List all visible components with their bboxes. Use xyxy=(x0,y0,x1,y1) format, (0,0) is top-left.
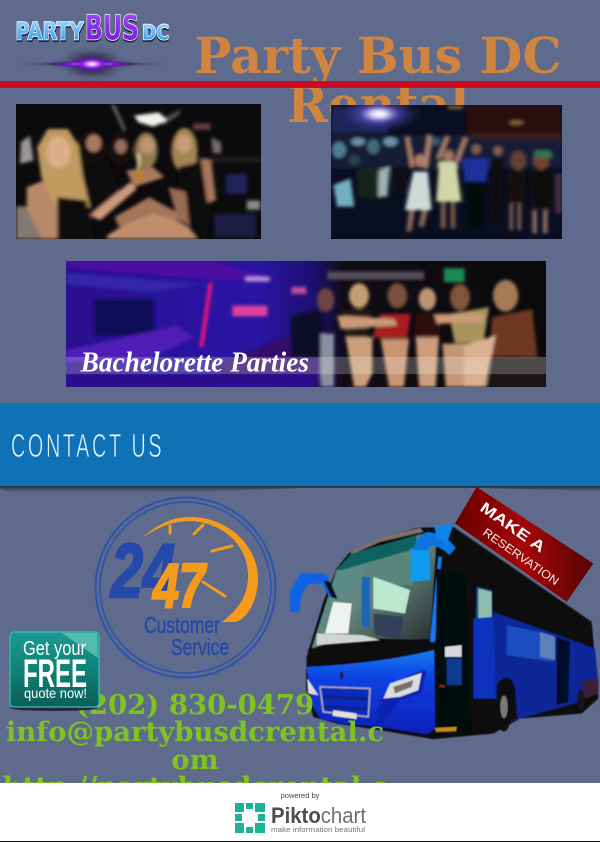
mirrors xyxy=(290,524,456,612)
ribbon: make a reservation xyxy=(455,487,593,602)
contact details: info@partybusdcrental.com xyxy=(6,716,384,776)
piktochart logo: Piktochart xyxy=(271,803,366,828)
lower black band xyxy=(308,638,433,665)
blond woman back xyxy=(135,132,158,169)
logo: Party Bus DC: PARTY xyxy=(16,19,84,47)
logo: Party Bus DC: DC xyxy=(142,20,169,44)
piktochart logo: powered by xyxy=(281,791,320,800)
windshield xyxy=(312,534,437,648)
badge: 24/7 customer service xyxy=(94,496,276,678)
gauge arc xyxy=(142,517,258,622)
button: get your free quote now: Get your xyxy=(23,638,86,660)
ribbon: make a reservation: MAKE A xyxy=(477,499,548,556)
contact details xyxy=(2,692,388,783)
sign xyxy=(327,272,424,280)
photo: dancing crowd xyxy=(331,105,562,239)
logo: Party Bus DC: DC xyxy=(142,22,169,46)
badge: 24/7 customer service: 24 xyxy=(109,529,175,614)
bus body xyxy=(306,527,598,739)
legs xyxy=(346,337,372,387)
footer: powered by piktochart xyxy=(0,783,600,841)
logo: Party Bus DC: BUS xyxy=(85,8,139,48)
button: get your free quote now: quote now! xyxy=(24,685,87,701)
women xyxy=(349,283,369,308)
roof trim xyxy=(350,528,423,554)
side panel xyxy=(493,612,598,725)
woman in dark xyxy=(317,288,334,312)
yellow dress dancer xyxy=(436,162,461,202)
title: Party Bus DC Rental xyxy=(194,27,562,134)
photo: women in limo xyxy=(16,104,261,239)
button: get your free quote now xyxy=(9,631,100,711)
banner: Bachelorette Parties xyxy=(66,261,546,387)
contact us heading: CONTACT US xyxy=(11,427,164,464)
badge: 24/7 customer service: Service xyxy=(171,634,229,660)
blue front xyxy=(307,650,435,734)
woman right xyxy=(171,128,197,173)
legs xyxy=(107,207,197,239)
ribbon: make a reservation: RESERVATION xyxy=(480,526,561,588)
logo: Party Bus DC: PARTY xyxy=(16,18,84,46)
crowd xyxy=(331,135,562,168)
bus illustration xyxy=(290,487,599,740)
dark hair women xyxy=(77,129,106,169)
band shadow xyxy=(0,486,600,492)
logo: Party Bus DC xyxy=(16,8,169,82)
white dress dancer xyxy=(405,172,432,210)
right women xyxy=(511,151,526,171)
badge: 24/7 customer service: Customer xyxy=(144,612,220,638)
badge: 24/7 customer service: 47 xyxy=(151,552,207,621)
blue shirt man xyxy=(462,158,489,182)
logo: Party Bus DC: BUS xyxy=(85,10,139,50)
front blond xyxy=(24,179,62,239)
red divider bar xyxy=(0,81,600,88)
piktochart logo xyxy=(235,791,366,834)
piktochart logo: make information beautiful xyxy=(271,825,365,834)
banner: Bachelorette Parties: Bachelorette Parties xyxy=(80,348,309,378)
contact us band xyxy=(0,403,600,486)
door pillar xyxy=(430,557,442,642)
bottom border xyxy=(0,841,600,842)
